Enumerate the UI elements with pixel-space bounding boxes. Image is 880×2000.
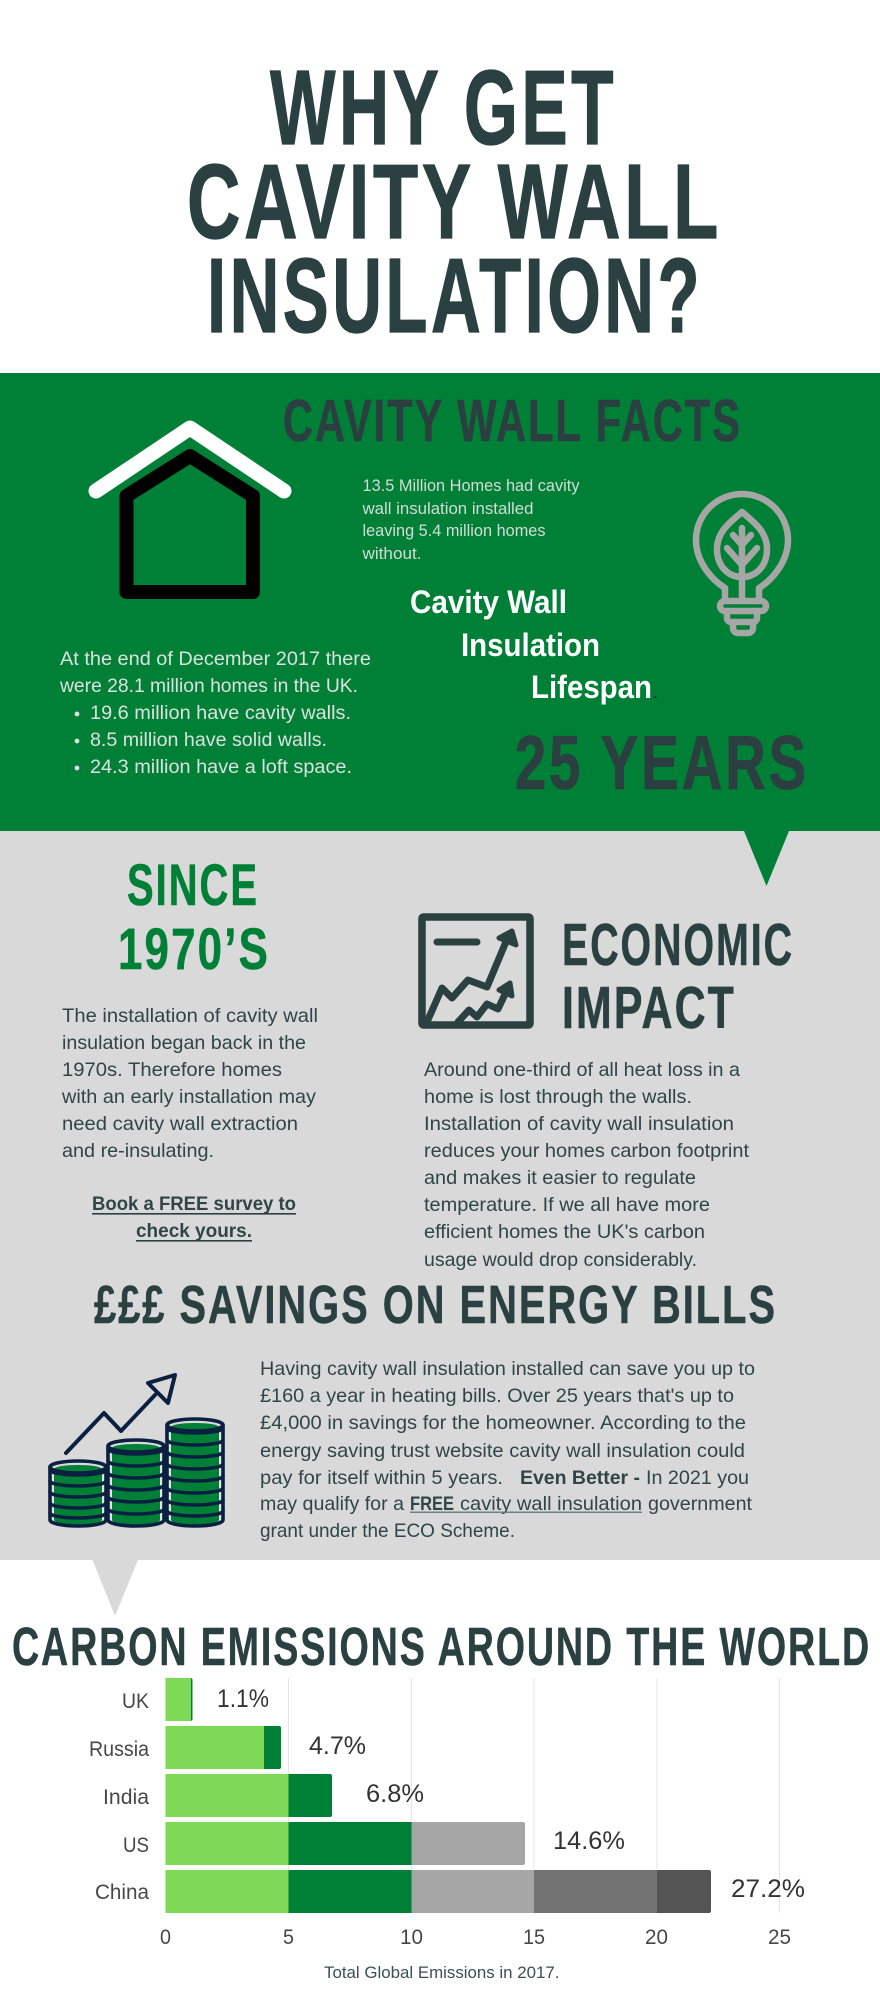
text block: installation history <box>61 1005 318 1162</box>
category labels: China <box>95 1881 149 1904</box>
text block: savings <box>260 1358 755 1542</box>
title <box>187 49 722 355</box>
text block: installation history: insulation began back in the <box>62 1032 306 1054</box>
category labels: US <box>123 1834 149 1857</box>
text block: savings: pay for itself within 5 years. <box>260 1467 503 1489</box>
bar: India <box>166 1774 332 1817</box>
bar: UK <box>166 1678 192 1721</box>
bar: US <box>166 1822 525 1865</box>
text block: installation history: and re-insulating. <box>62 1140 214 1162</box>
bar: China <box>166 1870 711 1913</box>
text block: homes installed: without. <box>361 544 422 563</box>
panel: economic and savings <box>0 831 880 1616</box>
text block: UK homes list: were 28.1 million homes in the UK. <box>59 676 358 697</box>
text block: savings: may qualify for a <box>260 1493 404 1515</box>
caption: total global emissions: Total Global Emissions in 2017. <box>324 1963 560 1982</box>
title: WHY GET <box>270 49 617 167</box>
axis labels: 0 <box>160 1926 171 1949</box>
text block: lifespan: Cavity Wall <box>410 584 567 620</box>
text block: lifespan: . <box>653 681 658 703</box>
text block: savings: Having cavity wall insulation installed can save you up to <box>260 1358 755 1380</box>
text block: economic impact: and makes it easier to regulate <box>424 1167 696 1189</box>
text block: economic impact: home is lost through the walls. <box>424 1086 692 1108</box>
axis labels: 25 <box>768 1926 791 1949</box>
icon: rising chart <box>422 917 530 1025</box>
text block: lifespan <box>410 584 658 705</box>
text block: UK homes list: 8.5 million have solid walls. <box>90 730 327 751</box>
text block: lifespan: Insulation <box>461 627 600 663</box>
panel: cavity wall facts <box>0 373 880 886</box>
category labels: India <box>103 1786 149 1809</box>
text block: savings: energy saving trust website cavity wall insulation could <box>260 1440 745 1462</box>
axis labels: 5 <box>283 1926 294 1949</box>
text block: economic impact <box>424 1059 750 1271</box>
text block: savings: £160 a year in heating bills. Over 25 years that's up to <box>260 1385 734 1407</box>
heading: since 1970's <box>118 853 270 982</box>
value labels: 6.8% <box>366 1780 424 1808</box>
heading: economic impact: IMPACT <box>562 975 736 1041</box>
icon: coin stacks with rising arrow <box>50 1375 223 1526</box>
value labels: 4.7% <box>309 1732 366 1760</box>
text block: savings: grant under the ECO Scheme. <box>260 1520 515 1542</box>
heading: since 1970's: 1970’S <box>118 917 270 982</box>
callout: book a free survey <box>92 1193 296 1242</box>
pointer: gray triangle <box>92 1560 138 1616</box>
axis labels: 15 <box>523 1926 545 1949</box>
heading: since 1970's: SINCE <box>127 853 259 918</box>
icon: lightbulb with leaf <box>696 494 788 633</box>
icon: house <box>96 428 284 592</box>
text block: UK homes list <box>59 649 371 778</box>
pointer: green triangle <box>744 831 789 886</box>
category labels: Russia <box>89 1738 149 1761</box>
text block: economic impact: reduces your homes carbon footprint <box>424 1140 750 1162</box>
text block: savings: £4,000 in savings for the homeowner. According to the <box>260 1412 746 1434</box>
text block: installation history: The installation of cavity wall <box>62 1005 318 1027</box>
text block: economic impact: efficient homes the UK's carbon <box>424 1221 705 1243</box>
text block: UK homes list: At the end of December 2017 there <box>60 649 371 670</box>
text block: homes installed <box>361 476 580 563</box>
value labels <box>217 1685 805 1903</box>
axis labels <box>160 1926 791 1949</box>
axis labels: 10 <box>400 1926 423 1949</box>
text block: savings: government <box>648 1493 753 1515</box>
heading: economic impact <box>562 912 794 1041</box>
callout: book a free survey: check yours. <box>136 1220 252 1242</box>
text block: UK homes list: 24.3 million have a loft space. <box>90 757 352 778</box>
text block: savings: In 2021 you <box>646 1467 749 1489</box>
text block: savings: Even Better - <box>520 1467 640 1489</box>
text block: installation history: 1970s. Therefore homes <box>62 1059 282 1081</box>
text block: savings: FREE <box>410 1493 454 1515</box>
value labels: 1.1% <box>217 1685 269 1713</box>
value labels: 14.6% <box>553 1827 625 1855</box>
bar chart: carbon emissions <box>89 1678 805 1949</box>
text block: economic impact: temperature. If we all have more <box>424 1194 710 1216</box>
text block: homes installed: leaving 5.4 million homes <box>362 521 546 540</box>
bar: Russia <box>166 1726 281 1769</box>
axis labels: 20 <box>645 1926 668 1949</box>
text block: economic impact: usage would drop considerably. <box>424 1249 697 1271</box>
text block: lifespan: Lifespan <box>531 669 652 705</box>
category labels <box>89 1690 149 1904</box>
text block: UK homes list: 19.6 million have cavity walls. <box>90 703 351 724</box>
value labels: 27.2% <box>731 1875 805 1903</box>
text block: savings: cavity wall insulation <box>460 1493 642 1515</box>
text block: installation history: need cavity wall extraction <box>62 1113 298 1135</box>
text block: economic impact: Installation of cavity wall insulation <box>424 1113 734 1135</box>
category labels: UK <box>122 1690 149 1713</box>
text block: homes installed: wall insulation installed <box>362 499 534 518</box>
text block: economic impact: Around one-third of all heat loss in a <box>424 1059 740 1081</box>
callout: book a free survey: Book a FREE survey to <box>92 1193 296 1215</box>
text block: homes installed: 13.5 Million Homes had cavity <box>362 476 580 495</box>
text block: installation history: with an early installation may <box>61 1086 316 1108</box>
